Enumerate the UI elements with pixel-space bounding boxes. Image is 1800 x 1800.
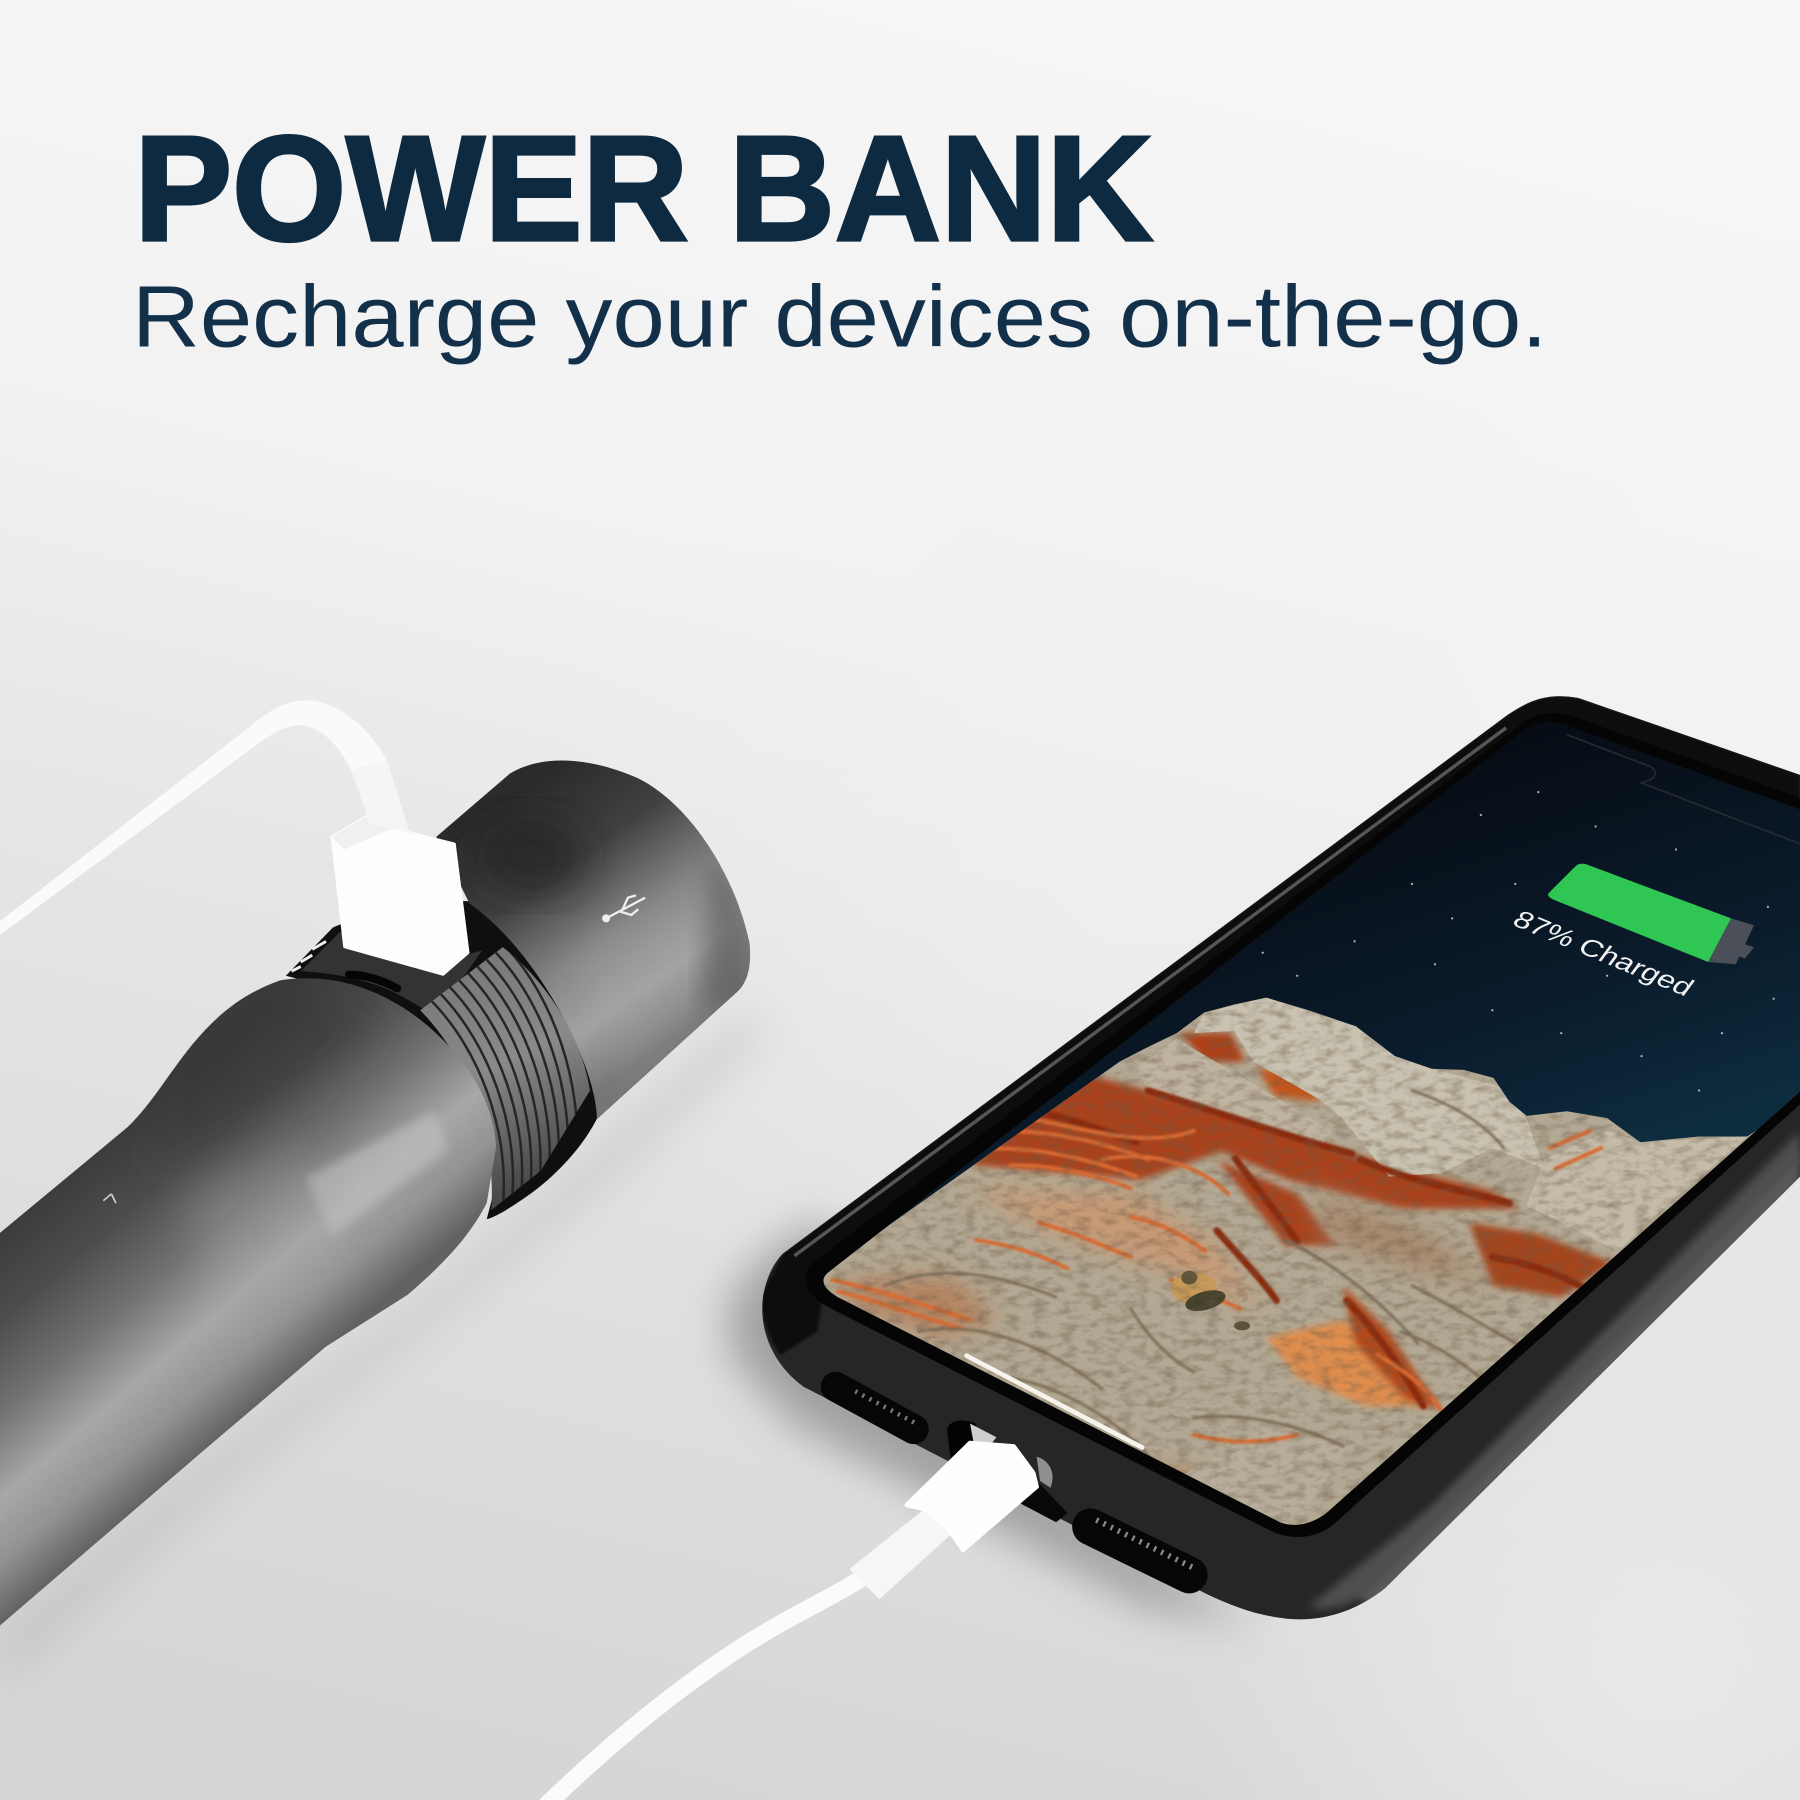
battery label: 87% Charged: [1507, 906, 1699, 1001]
bezel: [805, 713, 1800, 1537]
right speaker grille: [1091, 1520, 1194, 1575]
charging port slot: [349, 975, 397, 988]
indicator ticks: [292, 941, 326, 971]
stars: [1262, 791, 1775, 1092]
desert shrub: [1171, 1271, 1250, 1330]
red strata zone: [971, 1072, 1520, 1209]
phone case: [761, 696, 1800, 1630]
icon: usb symbol: [603, 895, 645, 921]
notch outline: [1567, 735, 1800, 844]
head cylinder: [436, 760, 758, 1119]
threaded ring: [420, 946, 590, 1210]
pale crest: [1194, 998, 1544, 1177]
usb cable to flashlight: [0, 700, 387, 937]
title: POWER BANK: [134, 105, 1153, 272]
flashlight shadow: [0, 1010, 769, 1688]
rock wallpaper: [823, 998, 1758, 1525]
flashlight: [0, 760, 758, 1626]
phone: [761, 689, 1800, 1630]
black collar: [286, 901, 604, 1219]
battery indicator: [1548, 864, 1754, 964]
charging port recess: [947, 1421, 1068, 1522]
rock texture: [824, 998, 1739, 1524]
lightning connector and cable: [540, 1443, 1037, 1800]
subtitle: Recharge your devices on-the-go.: [132, 269, 1547, 366]
strata lines: [1027, 1091, 1590, 1406]
glossy collar band: [301, 932, 482, 1016]
screen: [804, 689, 1800, 1538]
left speaker grille: [836, 1387, 916, 1429]
main body: [0, 978, 496, 1626]
phone shadow: [729, 1217, 1263, 1624]
home indicator: [967, 1356, 1142, 1448]
sky: [804, 689, 1800, 1378]
usb plug: [332, 760, 468, 975]
